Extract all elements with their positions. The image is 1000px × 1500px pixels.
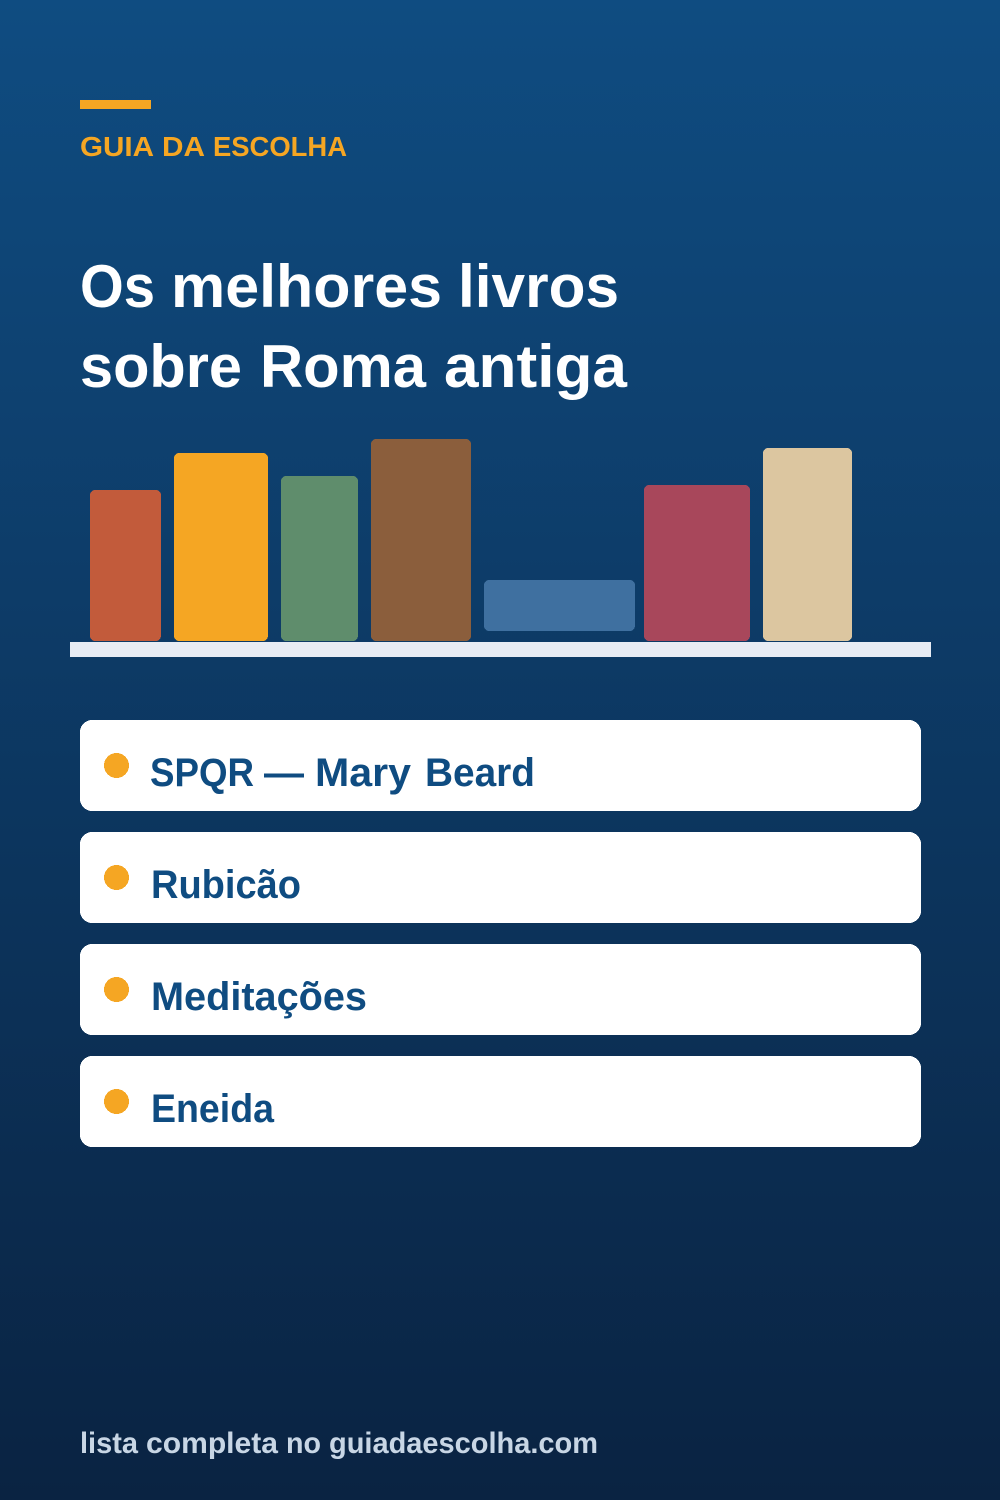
eyebrow label: GUIA	[80, 131, 154, 162]
title: melhores	[171, 253, 442, 320]
eyebrow label: ESCOLHA	[213, 131, 347, 162]
eyebrow label	[80, 131, 347, 162]
eyebrow label: DA	[162, 131, 205, 162]
title: sobre	[80, 333, 242, 400]
footer: no	[286, 1427, 321, 1460]
list item: SPQR: Mary	[315, 751, 412, 795]
footer: lista	[80, 1427, 138, 1460]
list item: Eneida	[80, 1056, 921, 1147]
list item: Rubicão	[80, 832, 921, 923]
list item: Meditações: Meditações	[151, 975, 367, 1019]
title	[80, 253, 628, 400]
footer: completa	[146, 1427, 278, 1460]
list item: Rubicão: Rubicão	[151, 863, 301, 907]
book: green	[281, 476, 358, 641]
list item: SPQR	[80, 720, 921, 811]
book: terracotta	[90, 490, 161, 641]
footer	[80, 1427, 598, 1460]
list item: Eneida: Eneida	[151, 1087, 275, 1131]
list item: SPQR: Beard	[425, 751, 535, 795]
footer: guiadaescolha.com	[329, 1427, 598, 1460]
title: Os	[80, 253, 155, 320]
shelf	[70, 642, 931, 657]
accent bar	[80, 100, 151, 109]
title: livros	[458, 253, 619, 320]
book: sand	[763, 448, 852, 641]
book: crimson	[644, 485, 750, 641]
title: antiga	[444, 333, 628, 400]
list item: SPQR: SPQR	[150, 751, 254, 795]
book: amber	[174, 453, 268, 641]
illustration: bookshelf	[70, 439, 931, 657]
list item: Meditações	[80, 944, 921, 1035]
list item: SPQR: —	[264, 751, 304, 795]
book: blue, lying flat	[484, 580, 635, 631]
title: Roma	[260, 333, 427, 400]
book: brown	[371, 439, 471, 641]
